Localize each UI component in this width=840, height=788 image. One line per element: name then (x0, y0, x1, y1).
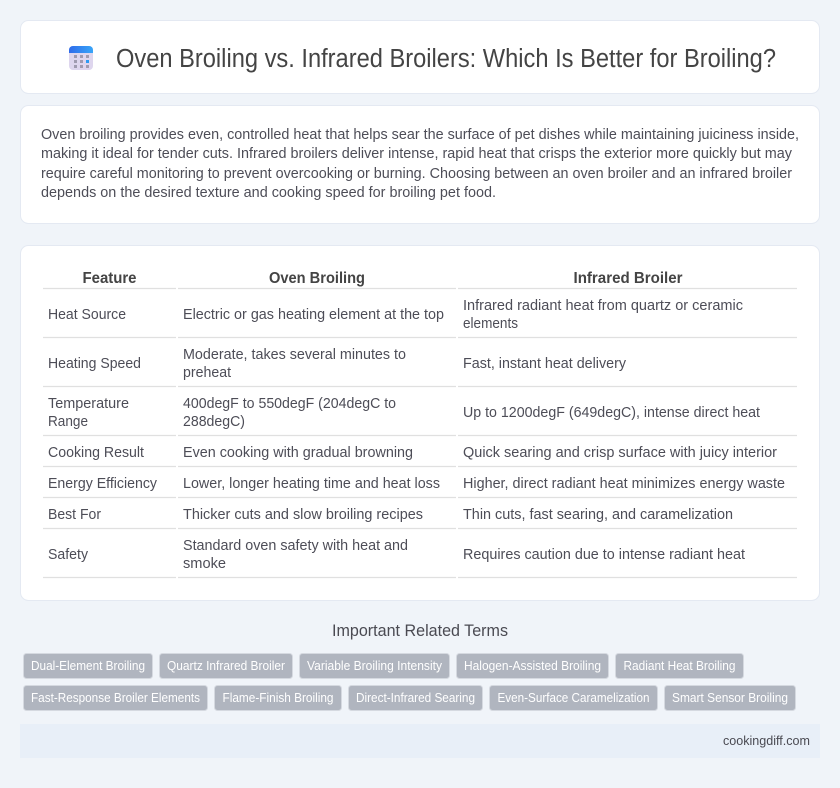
row: temperature range: 400degF to 550degF (204degC to (183, 396, 396, 412)
row: safety: Requires caution due to intense radiant heat (463, 547, 745, 563)
table header (82, 270, 682, 287)
intro text: depends on the desired texture and cooking speed for broiling pet food. (41, 185, 496, 201)
related terms tags: Quartz Infrared Broiler (167, 659, 285, 673)
row: energy efficiency (48, 476, 785, 492)
row: heat source: elements (463, 316, 518, 332)
row: cooking result (48, 445, 777, 461)
intro text: Oven broiling provides even, controlled heat that helps sear the surface of pet dishes while maintaining juiciness inside, (41, 127, 799, 143)
header panel (20, 20, 820, 94)
row: cooking result: Cooking Result (48, 445, 144, 461)
row: cooking result: Even cooking with gradual browning (183, 445, 413, 461)
row: best for: Thicker cuts and slow broiling recipes (183, 507, 423, 523)
table header: Feature (82, 270, 137, 287)
table header: Oven Broiling (269, 270, 365, 287)
related terms tags: Radiant Heat Broiling (624, 659, 736, 673)
intro text: require careful monitoring to prevent overcooking or burning. Choosing between an oven broiler and an infrared broiler (41, 166, 792, 182)
row: safety: Safety (48, 547, 89, 563)
row: best for (48, 507, 733, 523)
row: heating speed: Heating Speed (48, 356, 141, 372)
row: safety: Standard oven safety with heat and (183, 538, 408, 554)
row: heating speed: Fast, instant heat delivery (463, 356, 627, 372)
row: temperature range: Temperature (48, 396, 129, 412)
source credit: cookingdiff.com (723, 734, 810, 748)
related terms tags: Direct-Infrared Searing (356, 691, 475, 705)
related terms heading: Important Related Terms (332, 621, 508, 640)
row: temperature range (48, 396, 760, 430)
related terms tags: Smart Sensor Broiling (672, 691, 788, 705)
related terms tags (24, 654, 796, 710)
row: temperature range: Range (48, 414, 88, 430)
related terms tags: Even-Surface Caramelization (498, 691, 650, 705)
row: best for: Best For (48, 507, 101, 523)
related terms tags: Variable Broiling Intensity (307, 659, 443, 673)
row: heat source (48, 298, 743, 332)
related terms tags: Flame-Finish Broiling (222, 691, 334, 705)
row: energy efficiency: Lower, longer heating time and heat loss (183, 476, 440, 492)
icon: calendar (69, 46, 93, 70)
intro panel (20, 106, 820, 224)
title: Oven Broiling vs. Infrared Broilers: Which Is Better for Broiling? (116, 45, 776, 73)
intro text: making it ideal for tender cuts. Infrared broilers deliver intense, rapid heat that crisps the exterior more quickly but may (41, 146, 793, 162)
row: heating speed (48, 347, 627, 381)
row: energy efficiency: Energy Efficiency (48, 476, 158, 492)
row: temperature range: Up to 1200degF (649degC), intense direct heat (463, 405, 760, 421)
row: cooking result: Quick searing and crisp surface with juicy interior (463, 445, 777, 461)
row: safety (48, 538, 745, 572)
footer (20, 724, 820, 758)
comparison table panel (20, 246, 820, 600)
row: best for: Thin cuts, fast searing, and caramelization (463, 507, 733, 523)
related terms tags: Halogen-Assisted Broiling (464, 659, 601, 673)
related terms tags: Fast-Response Broiler Elements (31, 691, 200, 705)
row: heat source: Infrared radiant heat from quartz or ceramic (463, 298, 743, 314)
row: heating speed: preheat (183, 365, 231, 381)
row: heat source: Heat Source (48, 307, 126, 323)
row: heat source: Electric or gas heating element at the top (183, 307, 444, 323)
intro text (41, 127, 799, 201)
row: heating speed: Moderate, takes several minutes to (183, 347, 406, 363)
related terms tags: Dual-Element Broiling (31, 659, 145, 673)
table header: Infrared Broiler (574, 270, 682, 287)
row: energy efficiency: Higher, direct radiant heat minimizes energy waste (463, 476, 785, 492)
row: temperature range: 288degC) (183, 414, 245, 430)
row: safety: smoke (183, 556, 226, 572)
